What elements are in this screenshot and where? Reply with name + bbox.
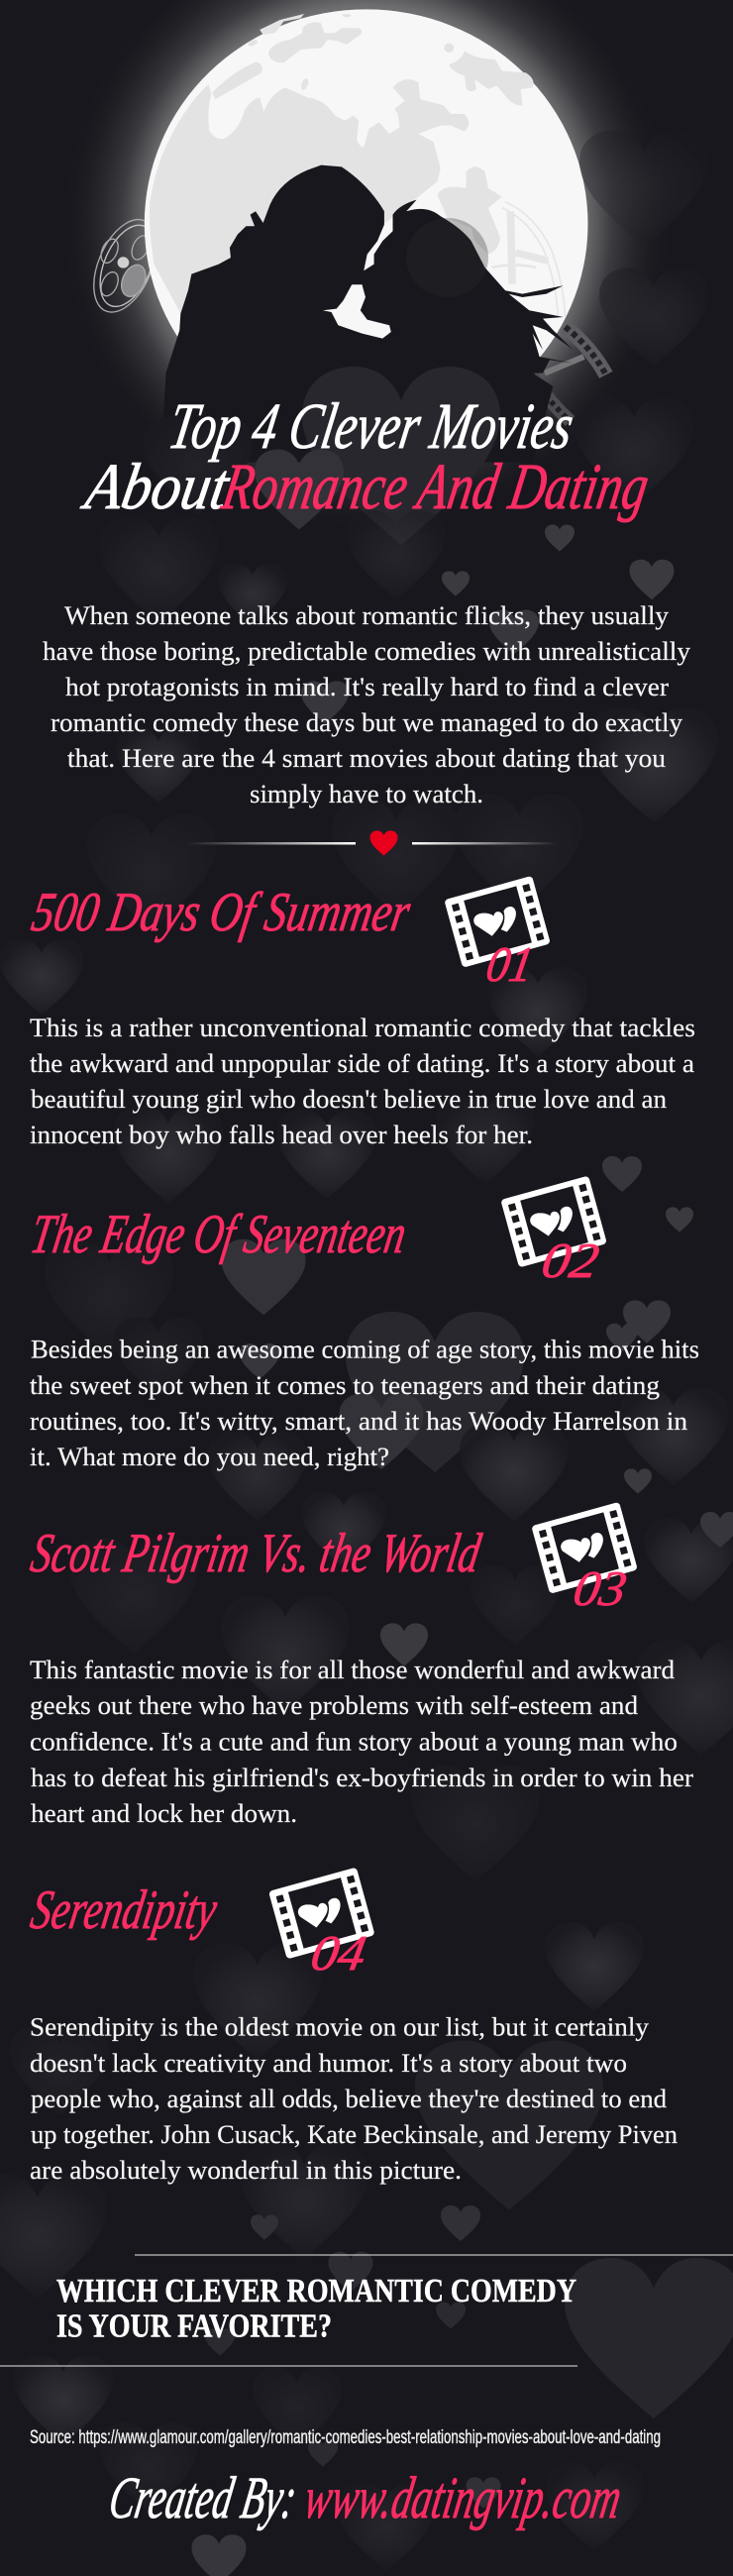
heading: The Edge Of Seventeen — [27, 1204, 411, 1265]
section 2: The Edge Of Seventeen — [27, 1176, 699, 1471]
intro paragraph: romantic comedy these days but we managed to do exactly — [51, 708, 682, 737]
closing question — [0, 2255, 733, 2366]
title: About — [77, 451, 235, 523]
body text: This fantastic movie is for all those wonderful and awkward — [30, 1656, 675, 1684]
gap between the couple — [323, 284, 391, 339]
heading: 500 Days Of Summer — [28, 882, 415, 943]
body text: geeks out there who have problems with self-esteem and — [30, 1691, 638, 1720]
icon: film frame 01: 01 — [482, 936, 538, 992]
section 1: 500 Days Of Summer — [28, 876, 695, 1149]
credit: Created By: — [105, 2465, 301, 2531]
credit — [105, 2465, 626, 2531]
icon: film frame 02 — [500, 1176, 607, 1288]
icon: film frame 03 — [531, 1502, 638, 1616]
body text: confidence. It's a cute and fun story about a young man who — [30, 1728, 678, 1756]
intro paragraph: hot protagonists in mind. It's really hard to find a clever — [65, 673, 669, 701]
icon: film frame 03: 03 — [570, 1560, 631, 1616]
body text — [30, 2013, 678, 2185]
title: Top 4 Clever Movies — [163, 390, 578, 463]
intro paragraph: have those boring, predictable comedies with unrealistically — [43, 637, 690, 666]
body text: Serendipity is the oldest movie on our list, but it certainly — [30, 2013, 649, 2041]
closing question: IS YOUR FAVORITE? — [56, 2308, 332, 2344]
title — [77, 390, 654, 523]
body text: the sweet spot when it comes to teenagers and their dating — [30, 1371, 660, 1400]
body text: it. What more do you need, right? — [30, 1443, 389, 1471]
body text: innocent boy who falls head over heels for her. — [30, 1121, 533, 1149]
body text: people who, against all odds, believe they're destined to end — [31, 2085, 667, 2113]
moon disc — [145, 9, 588, 439]
closing question: WHICH CLEVER ROMANTIC COMEDY — [56, 2273, 576, 2309]
icon: red heart — [370, 830, 398, 856]
body text: Besides being an awesome coming of age story, this movie hits — [31, 1336, 699, 1363]
heading: Serendipity — [27, 1879, 222, 1941]
section 3: Scott Pilgrim Vs. the World — [27, 1502, 693, 1828]
icon: film frame 04 — [268, 1868, 375, 1981]
body text: up together. John Cusack, Kate Beckinsale, and Jeremy Piven — [31, 2120, 678, 2149]
intro paragraph — [43, 601, 690, 808]
hero illustration: moon and couple — [81, 9, 606, 463]
intro paragraph: that. Here are the 4 smart movies about dating that you — [67, 744, 666, 773]
body text: heart and lock her down. — [31, 1799, 297, 1828]
section 4: Serendipity — [27, 1868, 678, 2185]
body text — [30, 1014, 695, 1149]
film strips — [491, 205, 606, 421]
heading: Scott Pilgrim Vs. the World — [27, 1523, 485, 1584]
body text — [30, 1656, 693, 1828]
moon surface spots — [150, 14, 534, 334]
body text: This is a rather unconventional romantic comedy that tackles — [30, 1014, 695, 1042]
divider with heart — [187, 830, 557, 856]
icon: film frame 01 — [444, 876, 551, 992]
couple silhouette — [160, 165, 574, 463]
body text: beautiful young girl who doesn't believe in true love and an — [31, 1085, 667, 1114]
icon: film reel — [81, 211, 168, 321]
icon: film frame 02: 02 — [538, 1233, 603, 1288]
body text: are absolutely wonderful in this picture. — [30, 2156, 462, 2185]
body text: has to defeat his girlfriend's ex-boyfriends in order to win her — [31, 1764, 693, 1792]
body text — [30, 1336, 699, 1471]
intro paragraph: When someone talks about romantic flicks, they usually — [64, 601, 669, 630]
icon: film frame 04: 04 — [307, 1925, 370, 1981]
body text: the awkward and unpopular side of dating. It's a story about a — [30, 1049, 694, 1078]
moon glow — [59, 0, 674, 531]
body text: routines, too. It's witty, smart, and it has Woody Harrelson in — [30, 1407, 687, 1436]
intro paragraph: simply have to watch. — [250, 780, 483, 808]
body text: doesn't lack creativity and humor. It's a story about two — [30, 2049, 627, 2078]
